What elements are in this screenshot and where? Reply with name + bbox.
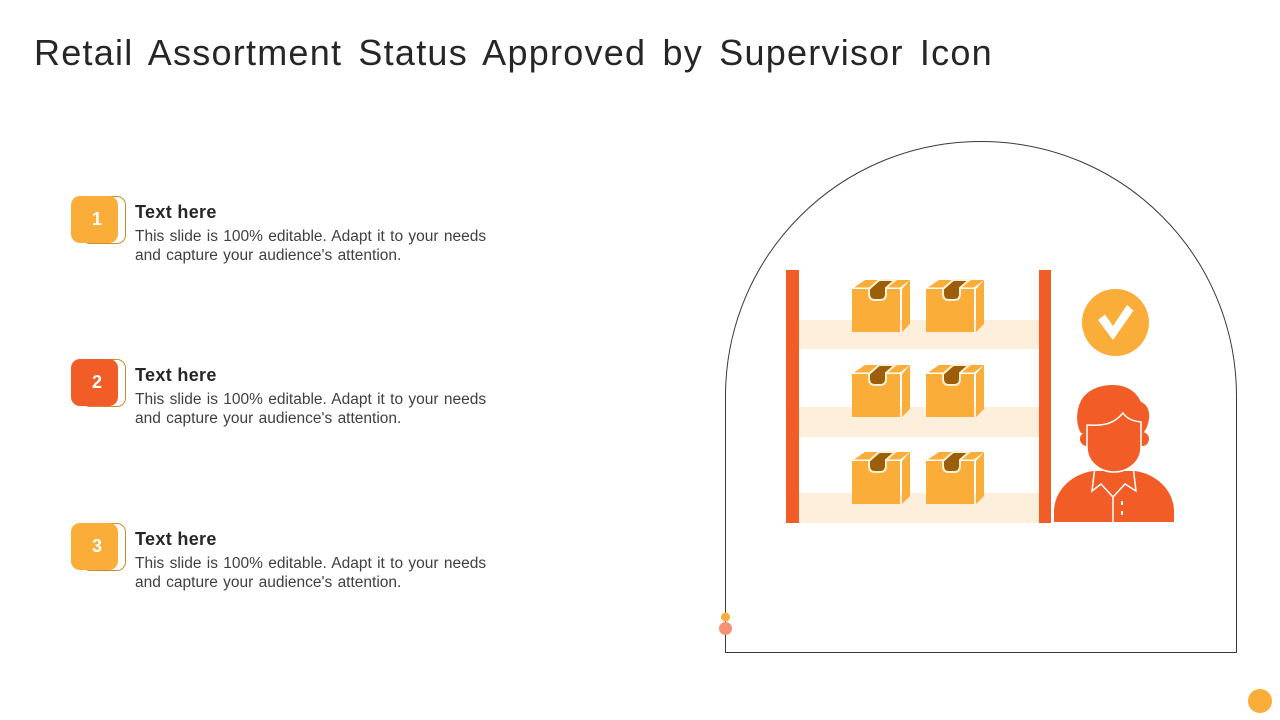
large salmon dot bbox=[719, 622, 732, 635]
list item 2 bbox=[71, 359, 486, 427]
small orange dot bbox=[721, 612, 730, 622]
list item 3 bbox=[71, 523, 486, 591]
badge 2 bbox=[71, 359, 126, 407]
description 1 bbox=[135, 228, 486, 264]
boxes on shelves bbox=[852, 280, 984, 504]
icon: approval check bbox=[1082, 289, 1149, 356]
description 3 bbox=[135, 555, 486, 591]
list item 1 bbox=[71, 196, 486, 264]
shelf unit bbox=[786, 270, 1051, 523]
heading 3: Text here bbox=[135, 529, 217, 549]
heading 1: Text here bbox=[135, 202, 217, 222]
icon: supervisor bbox=[1054, 385, 1174, 522]
badge 3 bbox=[71, 523, 126, 571]
badge 1: 1 bbox=[92, 209, 102, 229]
description 1: This slide is 100% editable. Adapt it to your needs bbox=[135, 228, 486, 245]
page marker dot bbox=[1248, 689, 1272, 713]
badge 3: 3 bbox=[92, 536, 102, 556]
description 3: This slide is 100% editable. Adapt it to your needs bbox=[135, 555, 486, 572]
description 3: and capture your audience's attention. bbox=[135, 574, 401, 591]
heading 2: Text here bbox=[135, 365, 217, 385]
description 2: This slide is 100% editable. Adapt it to your needs bbox=[135, 391, 486, 408]
arch outline bbox=[726, 142, 1236, 652]
description 2: and capture your audience's attention. bbox=[135, 410, 401, 427]
title: Retail Assortment Status Approved by Supervisor Icon bbox=[34, 32, 993, 73]
description 1: and capture your audience's attention. bbox=[135, 247, 401, 264]
description 2 bbox=[135, 391, 486, 427]
badge 1 bbox=[71, 196, 126, 244]
badge 2: 2 bbox=[92, 372, 102, 392]
